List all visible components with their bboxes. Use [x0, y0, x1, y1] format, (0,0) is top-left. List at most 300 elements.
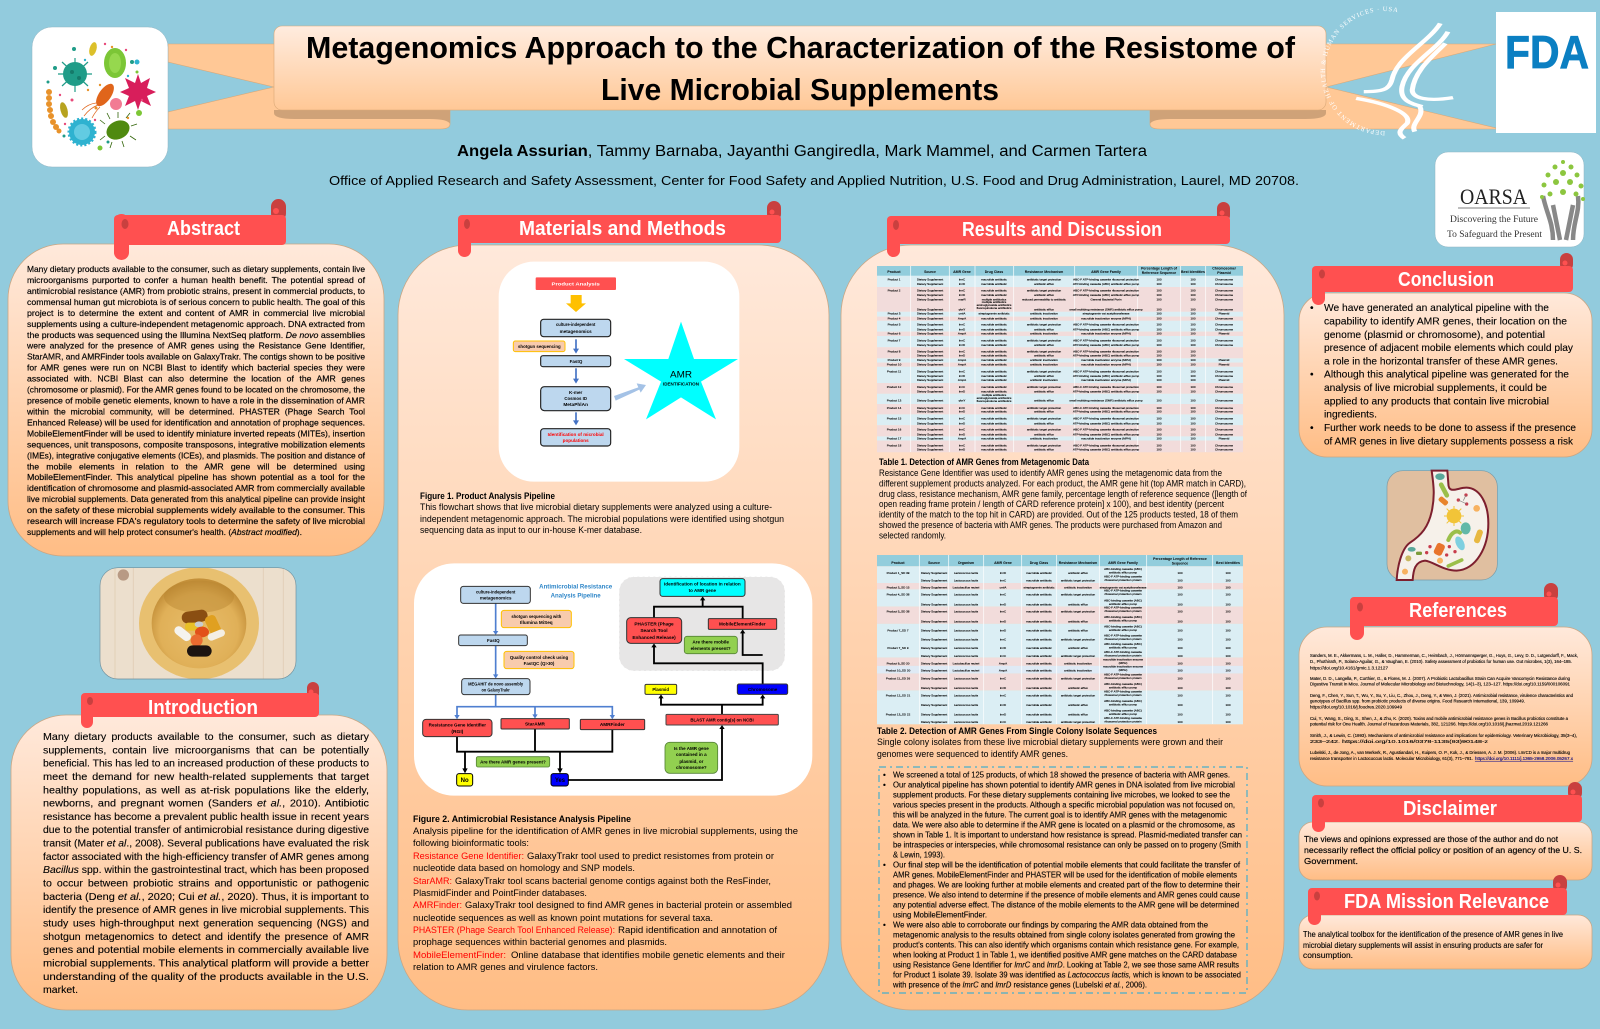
heading banner: abstract: [114, 199, 286, 260]
table 1: AMR genes from metagenomic data: 100: [1190, 399, 1196, 403]
table 1: AMR genes from metagenomic data: 100: [1190, 410, 1196, 414]
table 2: AMR genes from single colony isolates: antibiotic target protection: [1061, 720, 1096, 724]
figure 2: antimicrobial resistance analysis pipeline: Quality control check using: [510, 655, 568, 660]
table 1: AMR genes from metagenomic data: antibiotic inactivation: [1030, 437, 1058, 441]
table 2: AMR genes from single colony isolates: ribosomal protection protein: [1104, 592, 1142, 596]
table 1: AMR genes from metagenomic data: Dietary Supplement: [917, 432, 943, 436]
reference list: Lubelski, J., de Jong, A., van Merkerk, R., Agustiandari, H., Kuipers, O. P., Kok, J., & Driessen, A. J. M. (2006). LmrCD is a major multidrug: [1310, 750, 1570, 755]
results bullet box: be intraspecies or interspecies, while chromosomal resistance can only be passed on to progeny (Smith: [893, 840, 1241, 849]
table 2: AMR genes from single colony isolates: 100: [1225, 669, 1231, 673]
table 1: AMR genes from metagenomic data: ATP-binding cassette (ABC) antibiotic efflux pump: [1073, 293, 1139, 297]
table 1: AMR genes from metagenomic data: small multidrug resistance (SMR) antibiotic efflux pump: [1069, 399, 1143, 403]
table 2: AMR genes from single colony isolates: macrolide antibiotic: [1026, 629, 1052, 633]
results bullet box: Our analytical pipeline has shown potential to identify AMR genes in DNA isolated from live microbial: [893, 780, 1235, 790]
table 1: AMR genes from metagenomic data: macrolide antibiotic: [981, 328, 1007, 332]
results bullet box: We screened a total of 125 products, of which 18 showed the presence of bacteria with AMR genes.: [893, 770, 1230, 780]
table 1: AMR genes from metagenomic data: Product 11: [887, 370, 901, 374]
results bullet box: data. We were also able to determine if the AMR gene is located on a plasmid or the chromosome, as: [893, 820, 1235, 830]
affiliation: Office of Applied Research and Safety Assessment, Center for Food Safety and Applied Nutrition, U.S. Food and Drug Administration, Laurel, MD 20708.: [329, 173, 1299, 188]
table 1: AMR genes from metagenomic data: lmrD: [959, 374, 966, 378]
table 1: AMR genes from metagenomic data: [877, 266, 1243, 452]
heading banner: abstract: Abstract: [167, 218, 240, 240]
table 2: AMR genes from single colony isolates: macrolide antibiotic: [1026, 603, 1052, 607]
abstract text: MobileElementFinder. This analytical pipeline has shown potential as a tool for the: [27, 472, 365, 482]
table 1: AMR genes from metagenomic data: lmrD: [959, 293, 966, 297]
table 2: AMR genes from single colony isolates: antibiotic target protection: [1061, 610, 1096, 614]
table 2: AMR genes from single colony isolates: ribosomal protection protein: [1104, 654, 1142, 658]
table 1: AMR genes from metagenomic data: AmpA: [958, 378, 966, 382]
table 1: AMR genes from metagenomic data: 100: [1156, 298, 1162, 302]
reference list: D., Phothirath, P., Solano-Aguilar, G., & Vaughan, E. (2010). Safety assessment of probiotics for human use. Gut microbes, 1(3), 164–185.: [1310, 659, 1572, 664]
table 2: AMR genes from single colony isolates: ABC-binding cassette (ABC): [1104, 598, 1142, 602]
disclaimer text: necessarily reflect the official policy or position of an agency of the U. S.: [1304, 845, 1582, 855]
table 2: AMR genes from single colony isolates: Dietary Supplement: [921, 593, 947, 597]
table 1: AMR genes from metagenomic data: Dietary Supplement: [917, 317, 943, 321]
introduction text: identify the presence of AMR genes in live microbial supplements. This: [43, 905, 369, 916]
table 2: AMR genes from single colony isolates: Lactococcus lactis: [954, 677, 979, 681]
abstract text: MobileElementFinder will be used to identify miniature inverted repeats (MITEs), insertion: [27, 428, 365, 438]
table 2: AMR genes from single colony isolates: Lactobacillus reuteri: [953, 669, 980, 673]
table 1: AMR genes from metagenomic data: antibiotic efflux: [1034, 432, 1054, 436]
table 1: AMR genes from metagenomic data: Dietary Supplement: [917, 448, 943, 452]
table 1: AMR genes from metagenomic data: Product 1: [888, 278, 901, 282]
table 1: AMR genes from metagenomic data: Product 18: [887, 443, 902, 447]
table 1: AMR genes from metagenomic data: macrolide antibiotic: [981, 417, 1007, 421]
table 1: AMR genes from metagenomic data: antibiotic efflux: [1034, 282, 1054, 286]
table 2: AMR genes from single colony isolates: Lactococcus lactis: [954, 571, 979, 575]
table 2: AMR genes from single colony isolates: macrolide antibiotic: [1026, 669, 1052, 673]
table 1: AMR genes from metagenomic data: Product 2: [888, 288, 901, 292]
table 2: AMR genes from single colony isolates: Lactobacillus reuteri: [953, 662, 980, 666]
conclusion bullets: •: [1310, 303, 1314, 314]
table 1: AMR genes from metagenomic data: 100: [1156, 437, 1162, 441]
table 1: AMR genes from metagenomic data: lmrC: [959, 443, 966, 447]
table 2: AMR genes from single colony isolates: 100: [1177, 713, 1183, 717]
table 1 caption: Table 1. Detection of AMR Genes from Metagenomic Data: [879, 457, 1090, 467]
figure 2 caption and tool descriptions: prophage sequences within bacterial genomes and plasmids.: [413, 937, 667, 947]
table 2: AMR genes from single colony isolates: Product 12_SD 21: [886, 694, 911, 698]
introduction text: understanding of the quality of the products available in the U.S.: [43, 972, 369, 983]
table 1: AMR genes from metagenomic data: macrolide antibiotic: [981, 448, 1007, 452]
table 1: AMR genes from metagenomic data: Chromosome: [1215, 410, 1233, 414]
table 1: AMR genes from metagenomic data: antibiotic inactivation: [1030, 317, 1058, 321]
table 2: AMR genes from single colony isolates: streptogramin antibiotic: [1023, 586, 1055, 590]
table 2: AMR genes from single colony isolates: Dietary Supplement: [921, 571, 947, 575]
conclusion bullets: We have generated an analytical pipeline with the: [1324, 303, 1549, 314]
figure 2 caption and tool descriptions: Figure 2. Antimicrobial Resistance Analysis Pipeline: [413, 814, 631, 824]
table 2: AMR genes from single colony isolates: Lactococcus lactis: [954, 610, 979, 614]
results bullet box: for Product 1 isolate 39. Isolate 39 was identified as Lactococcus lactis, which is known to be associated: [893, 971, 1241, 980]
table 1: AMR genes from metagenomic data: antibiotic inactivation: [1030, 332, 1058, 336]
table 2: AMR genes from single colony isolates: ABC-F ATP-binding cassette: [1104, 606, 1142, 610]
table 1: AMR genes from metagenomic data: 100: [1190, 370, 1196, 374]
table 1: AMR genes from metagenomic data: General Bacterial Porin: [1090, 298, 1122, 302]
figure 2: antimicrobial resistance analysis pipeline: BLAST AMR contig(s) on NCBI: [690, 718, 754, 723]
table 2: AMR genes from single colony isolates: ABC-binding cassette (ABC): [1104, 699, 1142, 703]
table 1: AMR genes from metagenomic data: antibiotic inactivation: [1030, 312, 1058, 316]
table 1: AMR genes from metagenomic data: ABC-F ATP-binding cassette ribosomal protection: [1073, 406, 1139, 410]
table 2: AMR genes from single colony isolates: macrolide antibiotic: [1026, 610, 1052, 614]
figure 1 caption: sequencing data as input to our in-house K-mer database.: [420, 525, 642, 535]
figure 2: antimicrobial resistance analysis pipeline: on GalaxyTrakr: [481, 687, 510, 692]
table 2: AMR genes from single colony isolates: Product 5_SD 38: [887, 610, 910, 614]
table 2: AMR genes from single colony isolates: ribosomal protection protein: [1104, 637, 1142, 641]
table 1: AMR genes from metagenomic data: 100: [1156, 428, 1162, 432]
table 1: AMR genes from metagenomic data: macrolide antibiotic: [981, 350, 1007, 354]
table 2 caption: Table 2. Detection of AMR Genes From Single Colony Isolate Sequences: [877, 726, 1157, 736]
reference list: https://doi.org/10.1016/j.foodres.2020.109949: [1310, 704, 1402, 710]
table 1 caption: drug class, resistance mechanism, AMR gene family, percentage length of reference sequence ([length of: [879, 489, 1247, 499]
table 2: AMR genes from single colony isolates: Lactococcus lactis: [954, 629, 979, 633]
table 2: AMR genes from single colony isolates: 100: [1225, 619, 1231, 623]
table 1 caption: open reading frame protein / length of CARD reference protein] x 100), and best identity (percent: [879, 499, 1224, 509]
table 1: AMR genes from metagenomic data: lmrD: [959, 448, 966, 452]
table 1: AMR genes from metagenomic data: Dietary Supplement: [917, 399, 943, 403]
introduction text: factor associated with the high-efficiency transfer of AMR genes among: [43, 852, 369, 863]
table 2: AMR genes from single colony isolates: ABC-F ATP-binding cassette: [1104, 574, 1142, 578]
table 2: AMR genes from single colony isolates: 100: [1225, 720, 1231, 724]
table 1: AMR genes from metagenomic data: Dietary Supplement: [917, 293, 943, 297]
table 2: AMR genes from single colony isolates: ABC-F ATP-binding cassette: [1104, 690, 1142, 694]
table 1: AMR genes from metagenomic data: Dietary Supplement: [917, 282, 943, 286]
table 2: AMR genes from single colony isolates: lmrD: [1000, 646, 1007, 650]
table 1: AMR genes from metagenomic data: Chromosome: [1215, 432, 1233, 436]
table 1: AMR genes from metagenomic data: macrolide inactivation enzyme (MPH): [1081, 358, 1131, 362]
table 2: AMR genes from single colony isolates: macrolide antibiotic: [1026, 694, 1052, 698]
results bullet box: •: [883, 770, 886, 780]
table 2: AMR genes from single colony isolates: ABC-binding cassette (ABC): [1104, 624, 1142, 628]
figure 2: antimicrobial resistance analysis pipeline: Identification of location in relation: [664, 582, 741, 587]
table 1: AMR genes from metagenomic data: Product 9: [888, 358, 901, 362]
disclaimer text: The views and opinions expressed are those of the author and do not: [1304, 834, 1559, 844]
heading banner: materials and methods: Materials and Methods: [519, 218, 726, 240]
microbe logo: [32, 27, 168, 167]
table 1: AMR genes from metagenomic data: 100: [1156, 399, 1162, 403]
table 2: AMR genes from single colony isolates: Dietary Supplement: [921, 638, 947, 642]
figure 2: antimicrobial resistance analysis pipeline: Yes: [555, 778, 566, 784]
table 1: AMR genes from metagenomic data: 100: [1190, 358, 1196, 362]
table 2: AMR genes from single colony isolates: Lactococcus lactis: [954, 646, 979, 650]
table 2: AMR genes from single colony isolates: antibiotic efflux: [1068, 571, 1088, 575]
table 2: AMR genes from single colony isolates: lmrD: [1000, 703, 1007, 707]
table 2: AMR genes from single colony isolates: ribosomal protection protein: [1104, 720, 1142, 724]
table 1: AMR genes from metagenomic data: macrolide antibiotic: [981, 288, 1007, 292]
table 1: AMR genes from metagenomic data: Product 14: [887, 406, 902, 410]
reference list: Smith, J., & Lewin, C. (1993). Mechanisms of antimicrobial resistance and implications for epidemiology. Veterinary Microbiology, 35(3–4),: [1310, 733, 1577, 738]
table 1 caption: [879, 457, 1247, 540]
figure 2: antimicrobial resistance analysis pipeline: (RGI): [451, 729, 464, 734]
table 1: AMR genes from metagenomic data: Dietary Supplement: [917, 363, 943, 367]
table 2: AMR genes from single colony isolates: ABC-binding cassette (ABC): [1104, 615, 1142, 619]
table 2: AMR genes from single colony isolates: antibiotic efflux pump: [1109, 602, 1137, 606]
figure 2: antimicrobial resistance analysis pipeline: No: [461, 778, 469, 784]
table 1: AMR genes from metagenomic data: Product 16: [887, 428, 902, 432]
table 1 caption: Resistance Gene Identifier was used to identify AMR genes using the metagenomic data from the: [879, 468, 1222, 478]
table 2: AMR genes from single colony isolates: lmrD: [1000, 603, 1007, 607]
table 2: AMR genes from single colony isolates: antibiotic target protection: [1061, 694, 1096, 698]
abstract text: (IMEs), integrative conjugative elements (ICEs), and plasmids. The position and distance of: [27, 450, 366, 460]
table 2: AMR genes from single colony isolates: ribosomal protection protein: [1104, 693, 1142, 697]
table 2: AMR genes from single colony isolates: antibiotic target protection: [1061, 579, 1096, 583]
table 2: AMR genes from single colony isolates: antibiotic target protection: [1061, 654, 1096, 658]
table 1: AMR genes from metagenomic data: macrolide antibiotic: [981, 317, 1007, 321]
table 1: AMR genes from metagenomic data: fluoroquinolone antibiotics: [977, 306, 1012, 310]
table 1: AMR genes from metagenomic data: 100: [1190, 332, 1196, 336]
table 1: AMR genes from metagenomic data: Dietary Supplement: [917, 389, 943, 393]
table 1: AMR genes from metagenomic data: Chromosome: [1215, 374, 1233, 378]
table 1: AMR genes from metagenomic data: Plasmid: [1217, 271, 1231, 275]
table 2: AMR genes from single colony isolates: 100: [1177, 619, 1183, 623]
table 2: AMR genes from single colony isolates: ABC-binding cassette (ABC): [1104, 708, 1142, 712]
table 1: AMR genes from metagenomic data: ABC-F ATP-binding cassette ribosomal protection: [1073, 428, 1139, 432]
table 2: AMR genes from single colony isolates: antibiotic efflux: [1068, 646, 1088, 650]
table 1: AMR genes from metagenomic data: 100: [1190, 298, 1196, 302]
figure 2: antimicrobial resistance analysis pipeline: chromosome?: [676, 765, 707, 770]
table 1: AMR genes from metagenomic data: lmrC: [959, 278, 966, 282]
table 2: AMR genes from single colony isolates: Lactococcus lactis: [954, 720, 979, 724]
introduction text: [43, 732, 370, 996]
table 1: AMR genes from metagenomic data: 100: [1190, 448, 1196, 452]
table 1: AMR genes from metagenomic data: ABC-F ATP-binding cassette ribosomal protection: [1073, 278, 1139, 282]
table 1: AMR genes from metagenomic data: macrolide inactivation enzyme (MPH): [1081, 437, 1131, 441]
heading banner: FDA mission relevance: [1308, 875, 1567, 925]
abstract text: presence of mobile genetic elements, known to have a role in the dissemination of AMR: [27, 396, 365, 406]
conclusion bullets: a role in the horizontal transfer of these AMR genes.: [1324, 356, 1558, 368]
table 1: AMR genes from metagenomic data: Dietary Supplement: [917, 350, 943, 354]
figure 2: antimicrobial resistance analysis pipeline: Illumina MiSeq: [520, 620, 553, 625]
table 1: AMR genes from metagenomic data: macrolide antibiotic: [981, 339, 1007, 343]
table 2: AMR genes from single colony isolates: antibiotic efflux: [1068, 603, 1088, 607]
table 1: AMR genes from metagenomic data: macrolide inactivation enzyme (MPH): [1081, 378, 1131, 382]
table 2: AMR genes from single colony isolates: antibiotic efflux: [1068, 619, 1088, 623]
introduction text: Many dietary products available to the consumer, such as dietary: [43, 732, 370, 743]
table 1: AMR genes from metagenomic data: small multidrug resistance (SMR) antibiotic efflux pump: [1069, 307, 1143, 311]
abstract text: within the microbial community, will be determined. PHASTER (Phage Search Tool: [26, 406, 365, 416]
table 1: AMR genes from metagenomic data: Source: [924, 270, 936, 274]
table 2: AMR genes from single colony isolates: Lactococcus lactis: [954, 593, 979, 597]
results bullet box: & Lewin, 1993).: [893, 850, 945, 859]
abstract text: sequences, unit transposons, composite transposons, integrative mobilization elements: [27, 439, 365, 449]
table 2 caption: [877, 726, 1223, 759]
table 2: AMR genes from single colony isolates: lmrC: [1000, 677, 1007, 681]
reference list: genotypes of Bacillus spp. from probiotic products of diverse origins. Food Research International, 139, 109949.: [1310, 698, 1525, 704]
abstract text: [26, 264, 366, 537]
table 2: AMR genes from single colony isolates: AMR Gene Family: [1108, 561, 1138, 565]
figure 2 caption and tool descriptions: GalaxyTrakr tool designed to find AMR genes in bacterial protein or assembled: [465, 900, 792, 910]
figure 2 caption and tool descriptions: Analysis pipeline for the identification of AMR genes in live microbial supplements, using the: [413, 826, 798, 836]
table 1: AMR genes from metagenomic data: Chromosome/: [1212, 266, 1236, 270]
table 1: AMR genes from metagenomic data: 100: [1156, 339, 1162, 343]
table 1: AMR genes from metagenomic data: 100: [1190, 322, 1196, 326]
reference list: https://doi.org/10.4161/gmic.1.3.12127: [1310, 666, 1388, 670]
results bullet box: metagenomic analysis to the results obtained from single colony isolates generated from growing the: [893, 931, 1235, 940]
abstract text: Many dietary products available to the consumer, such as dietary supplements, contain live: [27, 264, 365, 274]
table 2: AMR genes from single colony isolates: ribosomal protection protein: [1104, 578, 1142, 582]
table 1: AMR genes from metagenomic data: Chromosome: [1215, 417, 1233, 421]
table 2: AMR genes from single colony isolates: 100: [1177, 593, 1183, 597]
table 2: AMR genes from single colony isolates: antibiotic efflux pump: [1109, 628, 1137, 632]
table 1: AMR genes from metagenomic data: ABC-F ATP-binding cassette ribosomal protection: [1073, 322, 1139, 326]
table 1: AMR genes from metagenomic data: macrolide antibiotic: [981, 432, 1007, 436]
table 1: AMR genes from metagenomic data: 100: [1190, 293, 1196, 297]
abstract text: StarAMR, and AMRFinder tools available on GalaxyTrakr. The contigs shown to be positive: [27, 352, 365, 362]
table 1: AMR genes from metagenomic data: ATP-binding cassette (ABC) antibiotic efflux pump: [1073, 410, 1139, 414]
table 2: AMR genes from single colony isolates: AmpA: [999, 669, 1007, 673]
OARSA logo: To Safeguard the Present: [1447, 229, 1542, 240]
figure 1: product analysis pipeline: K-mer: [569, 390, 583, 395]
figure 2 caption and tool descriptions: PlasmidFinder and PointFinder databases.: [413, 888, 587, 898]
table 1: AMR genes from metagenomic data: Dietary Supplement: [917, 378, 943, 382]
table 1: AMR genes from metagenomic data: Product 7: [888, 339, 901, 343]
figure 2: antimicrobial resistance analysis pipeline: culture-independent: [476, 589, 516, 594]
table 2: AMR genes from single colony isolates: Dietary Supplement: [921, 610, 947, 614]
table 2: AMR genes from single colony isolates: 100: [1225, 603, 1231, 607]
table 2 caption: Single colony isolates from these live microbial dietary supplements were grown and their: [877, 737, 1223, 747]
table 2: AMR genes from single colony isolates: cmlA: [1000, 586, 1006, 590]
table 1: AMR genes from metagenomic data: lmrD: [959, 389, 966, 393]
table 1: AMR genes from metagenomic data: 100: [1156, 417, 1162, 421]
table 1: AMR genes from metagenomic data: Chromosome: [1215, 385, 1233, 389]
introduction text: supplements, contain live microorganisms that can be potentially: [43, 745, 370, 756]
table 1: AMR genes from metagenomic data: lmrD: [959, 343, 966, 347]
table 1: AMR genes from metagenomic data: Dietary Supplement: [917, 410, 943, 414]
results bullet box: this will be analyzed in the future. The current goal is to identify AMR genes with the metagenomic: [893, 810, 1227, 820]
table 2: AMR genes from single colony isolates: streptogramin vat acetyltransferase: [1100, 586, 1147, 590]
table 1: AMR genes from metagenomic data: Dietary Supplement: [917, 343, 943, 347]
figure 2: antimicrobial resistance analysis pipeline: Is the AMR gene: [674, 746, 709, 751]
table 1: AMR genes from metagenomic data: ATP-binding cassette (ABC) antibiotic efflux pump: [1073, 343, 1139, 347]
table 2: AMR genes from single colony isolates: ABC-binding cassette (ABC): [1104, 567, 1142, 571]
table 1: AMR genes from metagenomic data: 100: [1190, 307, 1196, 311]
table 2: AMR genes from single colony isolates: lmrD: [1000, 713, 1007, 717]
table 1: AMR genes from metagenomic data: 100: [1156, 443, 1162, 447]
OARSA logo: Discovering the Future: [1450, 215, 1538, 225]
table 1: AMR genes from metagenomic data: lmrC: [959, 385, 966, 389]
table 1: AMR genes from metagenomic data: ATP-binding cassette (ABC) antibiotic efflux pump: [1073, 328, 1139, 332]
table 1: AMR genes from metagenomic data: Dietary Supplement: [917, 354, 943, 358]
figure 2: antimicrobial resistance analysis pipeline: Are there AMR genes present?: [480, 760, 546, 765]
table 2: AMR genes from single colony isolates: Product 10_SD 20: [886, 669, 911, 673]
table 1: AMR genes from metagenomic data: 100: [1190, 385, 1196, 389]
heading banner: references: References: [1409, 600, 1507, 622]
table 1: AMR genes from metagenomic data: antibiotic target protection: [1027, 406, 1062, 410]
table 2: AMR genes from single colony isolates: lmrC: [1000, 610, 1007, 614]
table 2: AMR genes from single colony isolates: 100: [1177, 586, 1183, 590]
table 2: AMR genes from single colony isolates: [877, 555, 1243, 724]
table 2: AMR genes from single colony isolates: macrolide antibiotic: [1026, 686, 1052, 690]
table 2: AMR genes from single colony isolates: Lactococcus lactis: [954, 713, 979, 717]
table 2: AMR genes from single colony isolates: AMR Gene: [994, 561, 1012, 565]
table 2: AMR genes from single colony isolates: lmrC: [1000, 654, 1007, 658]
table 1: AMR genes from metagenomic data: lmrD: [959, 354, 966, 358]
panel: conclusion: [1299, 253, 1592, 457]
table 2: AMR genes from single colony isolates: macrolide inactivation enzyme: [1103, 658, 1143, 662]
figure 2: antimicrobial resistance analysis pipeline: to AMR gene: [689, 588, 716, 593]
table 2: AMR genes from single colony isolates: macrolide antibiotic: [1026, 571, 1052, 575]
figure 1 caption: [420, 491, 784, 535]
figure 1: product analysis pipeline: IDENTIFICATION: [663, 382, 700, 387]
results bullet box: •: [883, 780, 886, 790]
table 1: AMR genes from metagenomic data: Percentage Length of: [1141, 266, 1178, 270]
table 1: AMR genes from metagenomic data: Product 10: [887, 363, 902, 367]
conclusion bullets: [1310, 303, 1576, 448]
results bullet box: various species present in the products. Although a specific microbial population was not focused on,: [893, 800, 1235, 810]
table 2: AMR genes from single colony isolates: antibiotic efflux pump: [1109, 702, 1137, 706]
table 1: AMR genes from metagenomic data: AmpA: [958, 317, 966, 321]
table 2: AMR genes from single colony isolates: Dietary Supplement: [921, 713, 947, 717]
table 2: AMR genes from single colony isolates: macrolide antibiotic: [1026, 703, 1052, 707]
table 1: AMR genes from metagenomic data: 100: [1156, 328, 1162, 332]
table 1: AMR genes from metagenomic data: ABC-F ATP-binding cassette ribosomal protection: [1073, 417, 1139, 421]
table 2: AMR genes from single colony isolates: 100: [1177, 603, 1183, 607]
blue connectors: [457, 603, 612, 717]
table 1: AMR genes from metagenomic data: multiple antibiotics: [982, 300, 1007, 304]
reference list: Deng, F., Chen, Y., Sun, T., Wu, Y., Su, Y., Liu, C., Zhou, J., Deng, Y., & Wen, J. (2021). Antimicrobial resistance, virulence characteristics and: [1310, 693, 1573, 698]
table 1: AMR genes from metagenomic data: Chromosome: [1215, 389, 1233, 393]
figure 2: antimicrobial resistance analysis pipeline: Resistance Gene Identifier: [429, 723, 486, 728]
abstract text: were analyzed for the presence of AMR genes using the Resistance Gene Identifier,: [26, 341, 365, 351]
table 1: AMR genes from metagenomic data: Product 12: [887, 385, 902, 389]
conclusion bullets: •: [1310, 423, 1314, 434]
table 1: AMR genes from metagenomic data: antibiotic target protection: [1027, 370, 1062, 374]
FDA logo: FDA: [1505, 26, 1589, 78]
table 1: AMR genes from metagenomic data: macrolide antibiotic: [981, 343, 1007, 347]
conclusion bullets: Although this analytical pipeline was generated for the: [1324, 370, 1569, 380]
table 2: AMR genes from single colony isolates: Lactococcus lactis: [954, 619, 979, 623]
table 1: AMR genes from metagenomic data: 100: [1190, 354, 1196, 358]
panel: materials and methods: [398, 201, 829, 1010]
table 2: AMR genes from single colony isolates: ABC-F ATP-binding cassette: [1104, 672, 1142, 676]
table 2: AMR genes from single colony isolates: macrolide antibiotic: [1026, 677, 1052, 681]
table 1 caption: selected randomly.: [879, 530, 946, 540]
table 1: AMR genes from metagenomic data: 100: [1156, 374, 1162, 378]
reference list: 233–242. https://doi.org/10.1016/0378-1135(93)90148-z: [1310, 739, 1489, 744]
table 1: AMR genes from metagenomic data: 100: [1190, 363, 1196, 367]
table 2: AMR genes from single colony isolates: Lactococcus lactis: [954, 638, 979, 642]
abstract text: for AMR genes were run on NCBI Blast to identify which bacterial species they were: [27, 363, 365, 373]
table 1: AMR genes from metagenomic data: lmrD: [959, 328, 966, 332]
table 1: AMR genes from metagenomic data: Chromosome: [1215, 406, 1233, 410]
table 2: AMR genes from single colony isolates: Lactococcus lactis: [954, 694, 979, 698]
table 1: AMR genes from metagenomic data: Chromosome: [1215, 293, 1233, 297]
table 2: AMR genes from single colony isolates: Dietary Supplement: [921, 619, 947, 623]
table 1: AMR genes from metagenomic data: macrolide antibiotic: [981, 428, 1007, 432]
title ribbon: [168, 26, 1496, 129]
table 1: AMR genes from metagenomic data: macrolide antibiotic: [981, 322, 1007, 326]
table 1: AMR genes from metagenomic data: ABC-F ATP-binding cassette ribosomal protection: [1073, 385, 1139, 389]
table 2: AMR genes from single colony isolates: Best Identities: [1216, 561, 1240, 565]
figure 1: product analysis pipeline: AMR: [670, 370, 692, 380]
table 1: AMR genes from metagenomic data: Chromosome: [1215, 307, 1233, 311]
figure 2: antimicrobial resistance analysis pipeline: contained in a: [676, 752, 707, 757]
table 2: AMR genes from single colony isolates: Lactococcus lactis: [954, 654, 979, 658]
table 2: AMR genes from single colony isolates: Dietary Supplement: [921, 720, 947, 724]
abstract text: microorganisms purported to confer a human health benefit. The potential spread of: [27, 275, 366, 285]
table 1: AMR genes from metagenomic data: Plasmid: [1219, 378, 1230, 382]
figure 2: antimicrobial resistance analysis pipeline: Are there mobile: [692, 640, 729, 645]
table 2: AMR genes from single colony isolates: 100: [1177, 654, 1183, 658]
table 2: AMR genes from single colony isolates: Product: [891, 561, 905, 565]
table 1: AMR genes from metagenomic data: Plasmid: [1219, 437, 1230, 441]
table 1: AMR genes from metagenomic data: Dietary Supplement: [917, 437, 943, 441]
introduction text: shotgun metagenomics to detect and identify the presence of AMR: [43, 932, 369, 943]
table 2: AMR genes from single colony isolates: macrolide antibiotic: [1026, 646, 1052, 650]
introduction text: market.: [43, 985, 78, 996]
table 1: AMR genes from metagenomic data: macrolide antibiotic: [981, 389, 1007, 393]
table 2: AMR genes from single colony isolates: lmrD: [1000, 629, 1007, 633]
table 2: AMR genes from single colony isolates: ribosomal protection protein: [1104, 609, 1142, 613]
table 2: AMR genes from single colony isolates: Dietary Supplement: [921, 579, 947, 583]
